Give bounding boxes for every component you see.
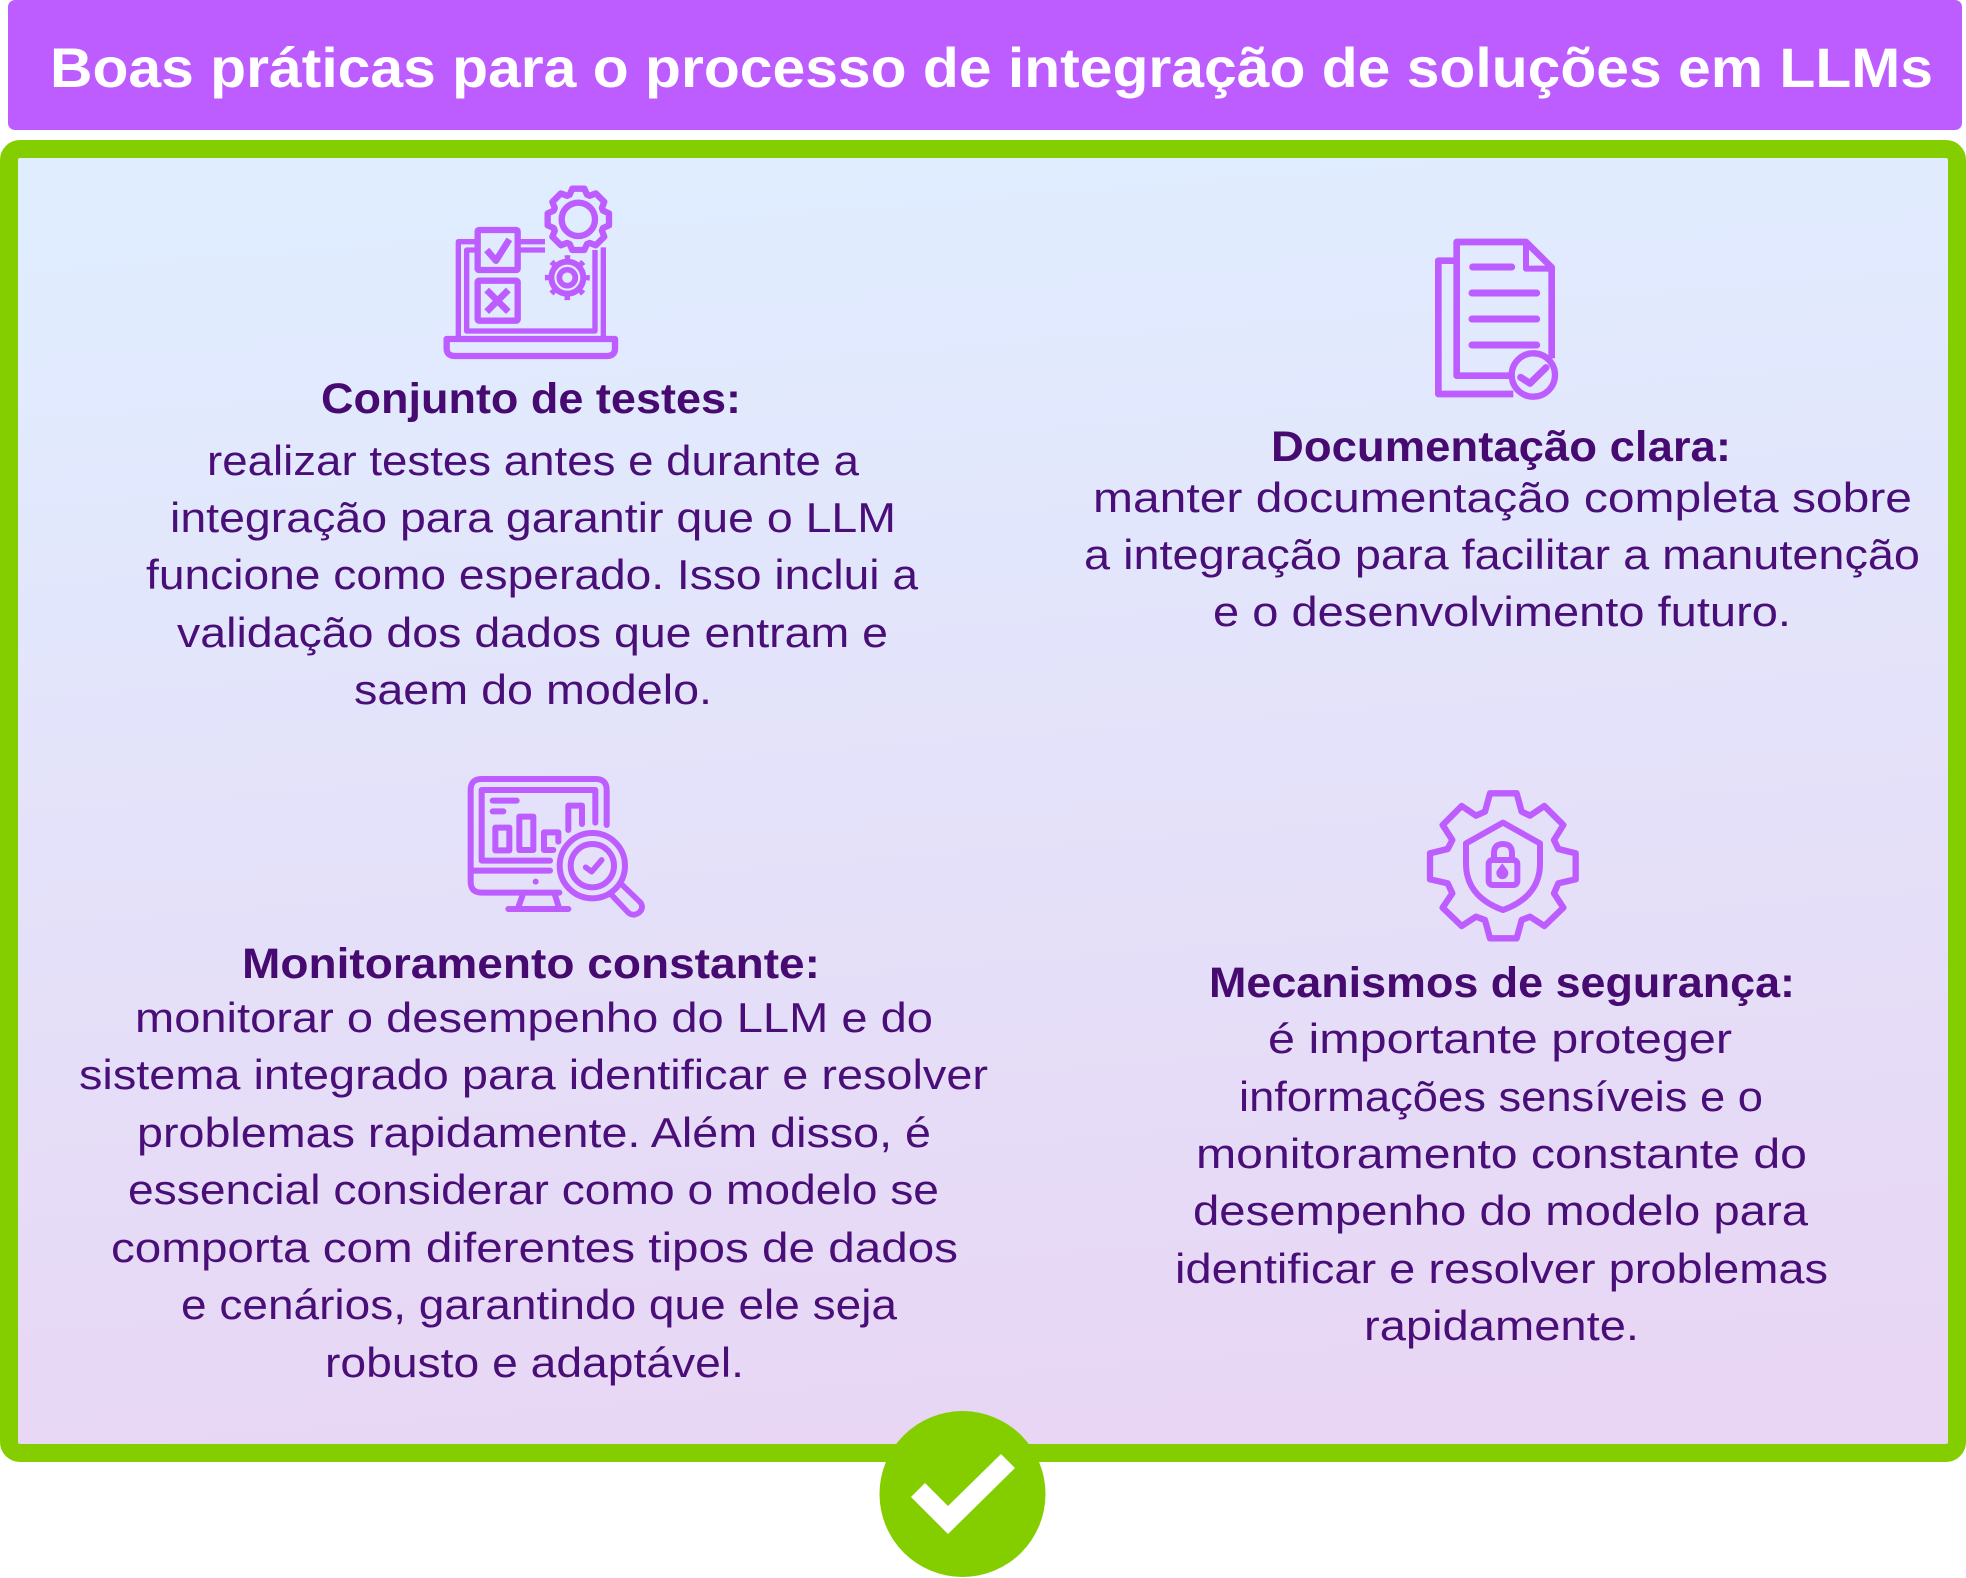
body text: problemas rapidamente. Além disso, é [137, 1109, 931, 1156]
body text [79, 994, 988, 1386]
body text: desempenho do modelo para [1193, 1187, 1809, 1234]
heading: Documentação clara: [1271, 423, 1731, 471]
header banner [8, 0, 1962, 130]
body text [1084, 474, 1920, 635]
body text: identificar e resolver problemas [1175, 1245, 1828, 1292]
panel: monitoramento constante [79, 779, 988, 1386]
body text: integração para garantir que o LLM [170, 494, 896, 541]
heading: Monitoramento constante: [242, 940, 820, 988]
body text: realizar testes antes e durante a [207, 437, 860, 484]
title: Boas práticas para o processo de integração de soluções em LLMs [50, 36, 1933, 99]
body text: validação dos dados que entram e [177, 609, 888, 656]
body text: informações sensíveis e o [1239, 1073, 1763, 1120]
body text: rapidamente. [1364, 1302, 1639, 1349]
icon: laptop with checklist and gears [447, 189, 615, 356]
heading: Conjunto de testes: [321, 375, 741, 423]
icon: documents with check [1438, 242, 1555, 397]
body text [1175, 1015, 1828, 1349]
body text: comporta com diferentes tipos de dados [111, 1224, 958, 1271]
body text: e cenários, garantindo que ele seja [181, 1281, 898, 1328]
panel: mecanismos de segurança [1175, 793, 1828, 1349]
body text: sistema integrado para identificar e resolver [79, 1051, 988, 1098]
body text: saem do modelo. [354, 666, 712, 713]
body text: é importante proteger [1268, 1015, 1732, 1062]
body text: monitorar o desempenho do LLM e do [135, 994, 933, 1041]
body text: monitoramento constante do [1196, 1130, 1807, 1177]
body text: essencial considerar como o modelo se [128, 1166, 939, 1213]
icon: green check badge [880, 1411, 1046, 1577]
body text [146, 437, 919, 713]
body text: manter documentação completa sobre [1093, 474, 1912, 521]
body text: e o desenvolvimento futuro. [1213, 588, 1791, 635]
body text: a integração para facilitar a manutenção [1084, 531, 1920, 578]
panel: documentação clara [1084, 242, 1920, 635]
panel: conjunto de testes [146, 189, 919, 713]
heading: Mecanismos de segurança: [1209, 959, 1795, 1007]
icon: gear with shield and lock [1430, 793, 1576, 938]
body text: funcione como esperado. Isso inclui a [146, 551, 919, 598]
body text: robusto e adaptável. [325, 1339, 744, 1386]
icon: monitor with magnifier [471, 779, 642, 915]
